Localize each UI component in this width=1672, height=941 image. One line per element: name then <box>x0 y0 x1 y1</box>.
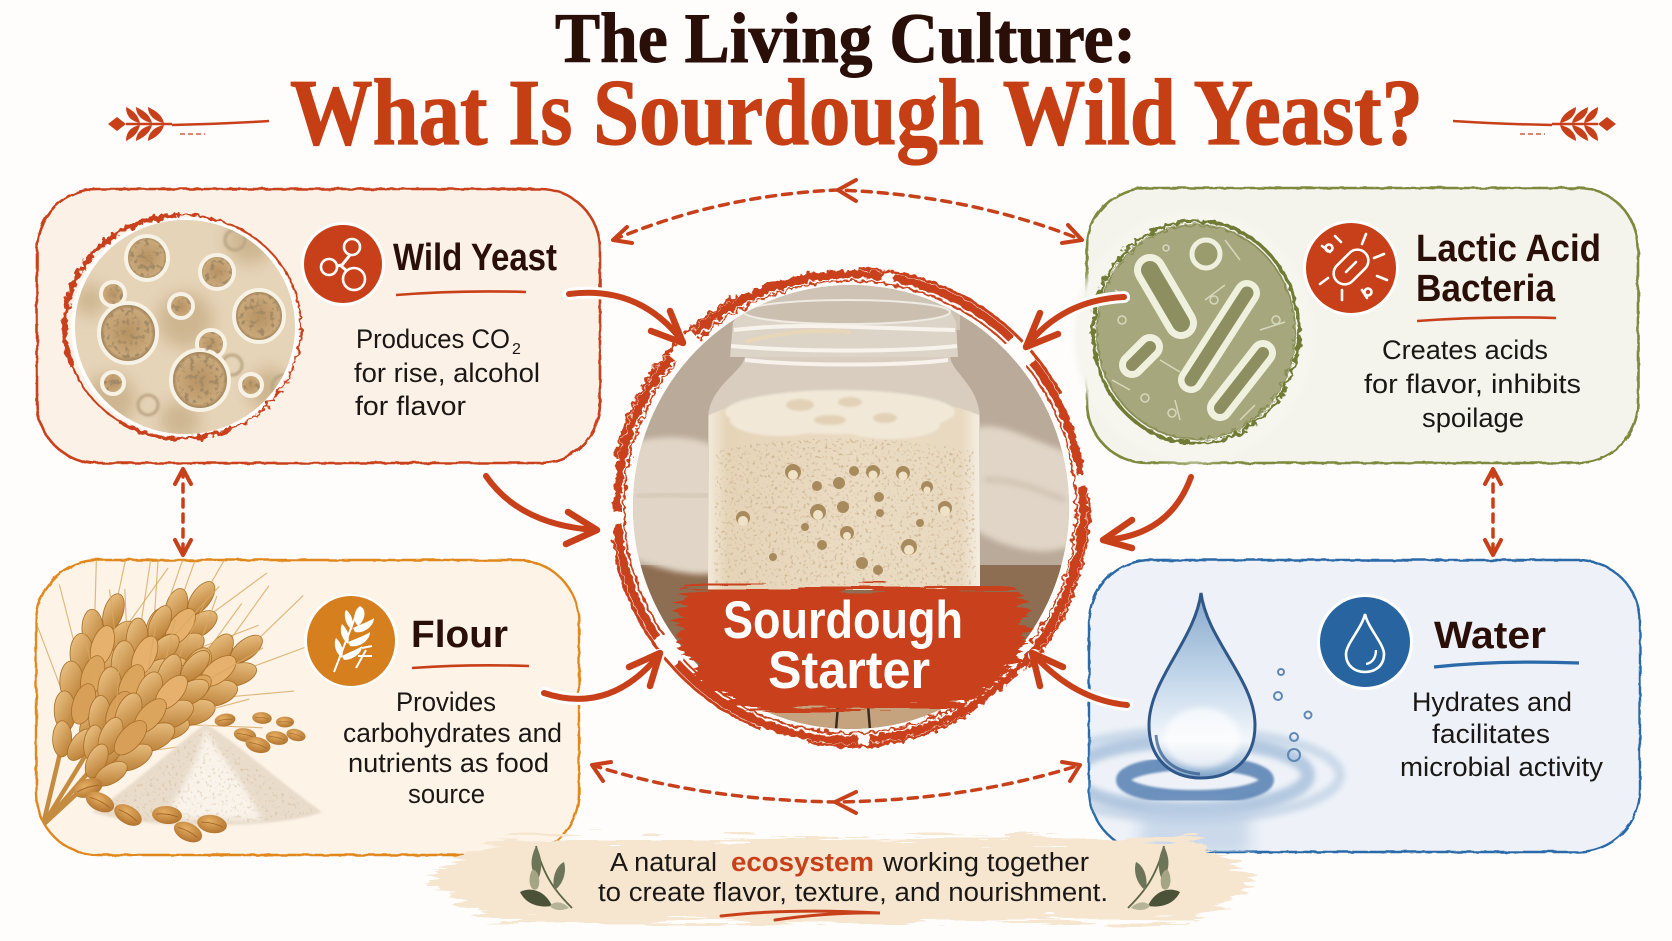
back grains <box>214 711 307 756</box>
heading underline <box>396 291 526 295</box>
wooden table <box>640 565 1062 729</box>
water reflection <box>1140 808 1250 856</box>
label text <box>723 591 963 700</box>
panel: water <box>1040 560 1640 856</box>
heading <box>1416 228 1601 310</box>
description <box>354 324 540 421</box>
wheat and flour image <box>38 560 322 842</box>
footer text: A natural <box>610 849 717 877</box>
wheat stems <box>42 754 116 826</box>
photo backdrop <box>633 285 1069 580</box>
description: for flavor, inhibits <box>1364 369 1581 399</box>
arrow: wild yeast upper <box>569 293 683 343</box>
card background <box>1087 188 1638 463</box>
wheat ears <box>38 560 305 786</box>
arrows: ingredients into starter <box>175 180 1501 813</box>
center: sourdough starter jar <box>610 266 1092 750</box>
arrow: wild yeast lower <box>486 476 597 544</box>
foreground grains <box>74 778 227 842</box>
heading underline <box>1434 662 1579 667</box>
description: for flavor <box>355 391 466 421</box>
description: 2 <box>512 341 521 358</box>
arrow: bacteria upper <box>1026 297 1124 347</box>
heading: Bacteria <box>1416 268 1556 310</box>
panel: flour <box>34 558 582 858</box>
panel: wild yeast <box>37 189 600 463</box>
yeast cells <box>99 236 284 410</box>
panel: lactic acid bacteria <box>1074 188 1638 463</box>
footer text: working together <box>882 849 1090 877</box>
bubble highlights <box>738 470 950 555</box>
arrow: flour <box>544 653 660 699</box>
water drop image <box>1089 592 1347 852</box>
description: for rise, alcohol <box>354 358 540 388</box>
dough foam <box>725 390 955 439</box>
heading: Lactic Acid <box>1416 228 1601 270</box>
yeast microscope image <box>65 215 301 440</box>
arrow: bacteria lower <box>1103 477 1191 548</box>
heading underline <box>1417 317 1556 321</box>
description <box>1400 687 1604 782</box>
heading underline <box>412 665 529 668</box>
description: Creates acids <box>1382 335 1548 365</box>
card background <box>37 189 600 463</box>
label banner <box>678 588 1026 708</box>
icon: water drop <box>1317 594 1413 690</box>
footer text: to create flavor, texture, and nourishment. <box>598 879 1108 907</box>
heading: Flour <box>411 614 508 656</box>
card background <box>36 560 579 855</box>
description: carbohydrates and <box>343 718 562 748</box>
right wheat flourish <box>1453 107 1616 141</box>
brush ring <box>520 177 1180 837</box>
bubbles <box>736 464 952 575</box>
jar glass <box>708 355 980 590</box>
icon: right leaves <box>1128 846 1180 910</box>
title line 2: What Is Sourdough Wild Yeast? <box>290 61 1423 165</box>
title <box>108 0 1616 165</box>
dashed arrow: top <box>613 180 1082 243</box>
card background <box>1089 560 1640 852</box>
drop <box>1149 593 1255 778</box>
dough <box>708 394 980 590</box>
cloth <box>625 426 1075 574</box>
heading: Wild Yeast <box>393 237 557 279</box>
dashed arrow: bottom <box>592 762 1080 813</box>
dashed arrow: left vertical <box>175 469 191 555</box>
footer text: ecosystem <box>731 849 874 877</box>
jar photo <box>633 285 1069 729</box>
description: microbial activity <box>1400 752 1604 782</box>
description: Hydrates and <box>1412 687 1572 717</box>
ripples <box>1040 731 1340 819</box>
label text: Sourdough <box>723 591 963 650</box>
description <box>1364 335 1581 433</box>
banner brush stroke <box>424 838 1258 922</box>
description: Produces CO <box>356 324 510 354</box>
left wheat flourish <box>108 107 269 141</box>
bacteria microscope image <box>1074 210 1314 462</box>
description <box>343 687 562 809</box>
icon: bacterium <box>1303 220 1399 316</box>
description: facilitates <box>1432 719 1550 749</box>
description: source <box>408 779 485 809</box>
footer text <box>598 849 1108 907</box>
droplets <box>1274 669 1312 761</box>
arrow: water <box>1032 653 1127 705</box>
icon: yeast cells <box>301 222 385 306</box>
footer banner <box>424 838 1258 922</box>
heading: Water <box>1434 615 1546 657</box>
dashed arrow: right vertical <box>1485 469 1501 555</box>
label text: Starter <box>768 641 930 700</box>
description: nutrients as food <box>348 748 549 778</box>
cell texture <box>101 238 282 408</box>
title line 1: The Living Culture: <box>555 0 1136 78</box>
description: spoilage <box>1422 403 1524 433</box>
flour pile <box>92 724 322 826</box>
description: Provides <box>396 687 496 717</box>
footer underline <box>721 911 880 920</box>
icon: wheat <box>304 594 398 688</box>
icon: left leaves <box>520 846 572 910</box>
